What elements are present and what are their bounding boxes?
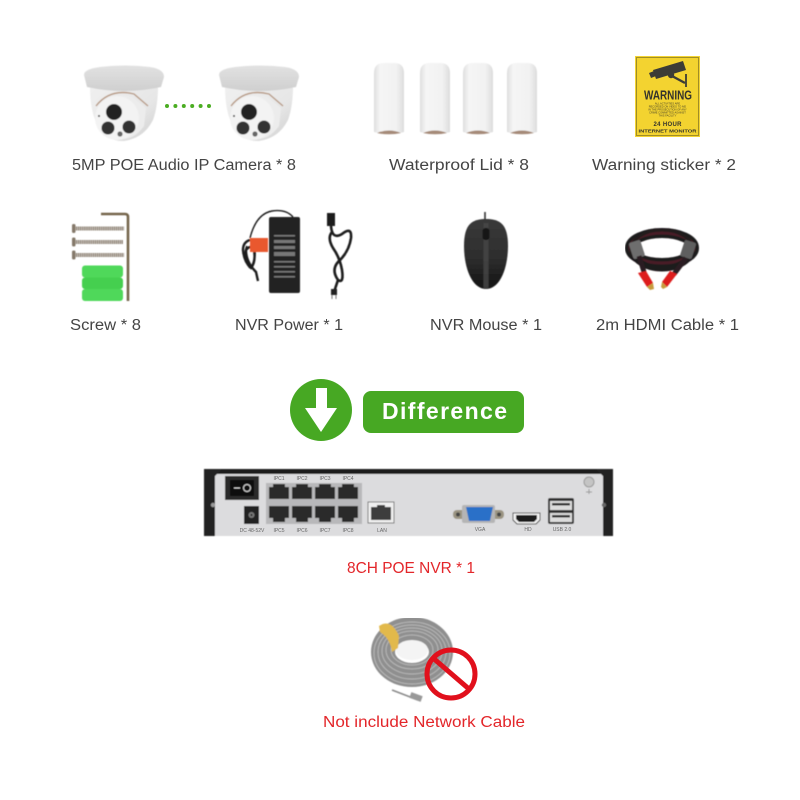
port labels: IPC8 — [342, 528, 354, 534]
icon: warning sticker: ALL ACTIVITIES ARE — [655, 102, 680, 106]
port labels: IPC3 — [319, 476, 331, 482]
port labels: IPC7 — [319, 528, 331, 534]
icon: warning sticker: 24 HOUR — [654, 122, 682, 128]
port labels: USB 2.0 — [553, 527, 572, 533]
icon: green down arrow — [290, 379, 352, 441]
icon: network cable coil — [374, 622, 450, 702]
power switch — [225, 476, 259, 500]
item: NVR recorder — [204, 469, 613, 577]
port labels: HD — [524, 527, 532, 533]
item: HDMI cable — [596, 230, 739, 334]
port labels: DC 48-52V — [240, 528, 265, 534]
icon: warning sticker — [635, 56, 700, 137]
port labels: LAN — [377, 528, 387, 534]
icon: prohibition sign — [427, 650, 475, 698]
label: screw: Screw * 8 — [70, 317, 141, 334]
icon: lids — [374, 63, 537, 134]
port labels: IPC6 — [296, 528, 308, 534]
label: lids: Waterproof Lid * 8 — [389, 157, 529, 174]
port labels: IPC1 — [273, 476, 285, 482]
label: camera: 5MP POE Audio IP Camera * 8 — [72, 157, 296, 174]
item: screws — [70, 214, 141, 334]
port labels — [240, 476, 572, 534]
label: sticker: Warning sticker * 2 — [592, 157, 736, 174]
icon: warning sticker: WARNING — [644, 88, 692, 102]
port labels: VGA — [475, 527, 486, 533]
icon: warning sticker: INTERNET MONITOR — [638, 128, 697, 134]
LAN port — [368, 502, 394, 523]
port labels: IPC5 — [273, 528, 285, 534]
icon: power adapter and cord — [243, 211, 351, 299]
icon: screws and hex key — [72, 214, 128, 301]
item: power supply — [235, 211, 351, 334]
USB ports — [548, 498, 574, 524]
badge: Difference: Difference — [382, 398, 507, 424]
item: cameras — [72, 66, 299, 174]
icon: mouse — [464, 212, 508, 289]
icon: HDMI cable — [629, 230, 696, 290]
icon: warning sticker: THIS FACILITY — [659, 114, 677, 118]
DC jack — [244, 506, 259, 524]
label: NVR: 8CH POE NVR * 1 — [347, 560, 475, 577]
icon: dome camera right — [219, 66, 299, 141]
port labels: IPC4 — [342, 476, 354, 482]
icon: warning sticker: CRIME COMMITTED AGAINST — [649, 110, 686, 114]
VGA port — [453, 505, 504, 523]
icon: warning sticker: IN THE PROSECUTION OF ANY — [648, 108, 687, 112]
item: warning sticker — [592, 56, 736, 174]
ground screw — [584, 477, 594, 494]
label: not included: Not include Network Cable — [323, 714, 525, 731]
icon: warning sticker: RECORDED ON VIDEO TO AID — [649, 104, 686, 108]
icon: connecting dots — [165, 104, 211, 108]
NVR back panel — [204, 469, 613, 536]
item: mouse — [430, 212, 542, 334]
badge: Difference — [363, 391, 524, 433]
PoE ports — [266, 483, 362, 524]
label: power: NVR Power * 1 — [235, 317, 343, 334]
item: waterproof lids — [374, 63, 537, 174]
label: HDMI: 2m HDMI Cable * 1 — [596, 317, 739, 334]
port labels: IPC2 — [296, 476, 308, 482]
HDMI port — [513, 513, 540, 524]
label: mouse: NVR Mouse * 1 — [430, 317, 542, 334]
item: network cable — [323, 622, 525, 731]
icon: dome camera left — [84, 66, 164, 141]
